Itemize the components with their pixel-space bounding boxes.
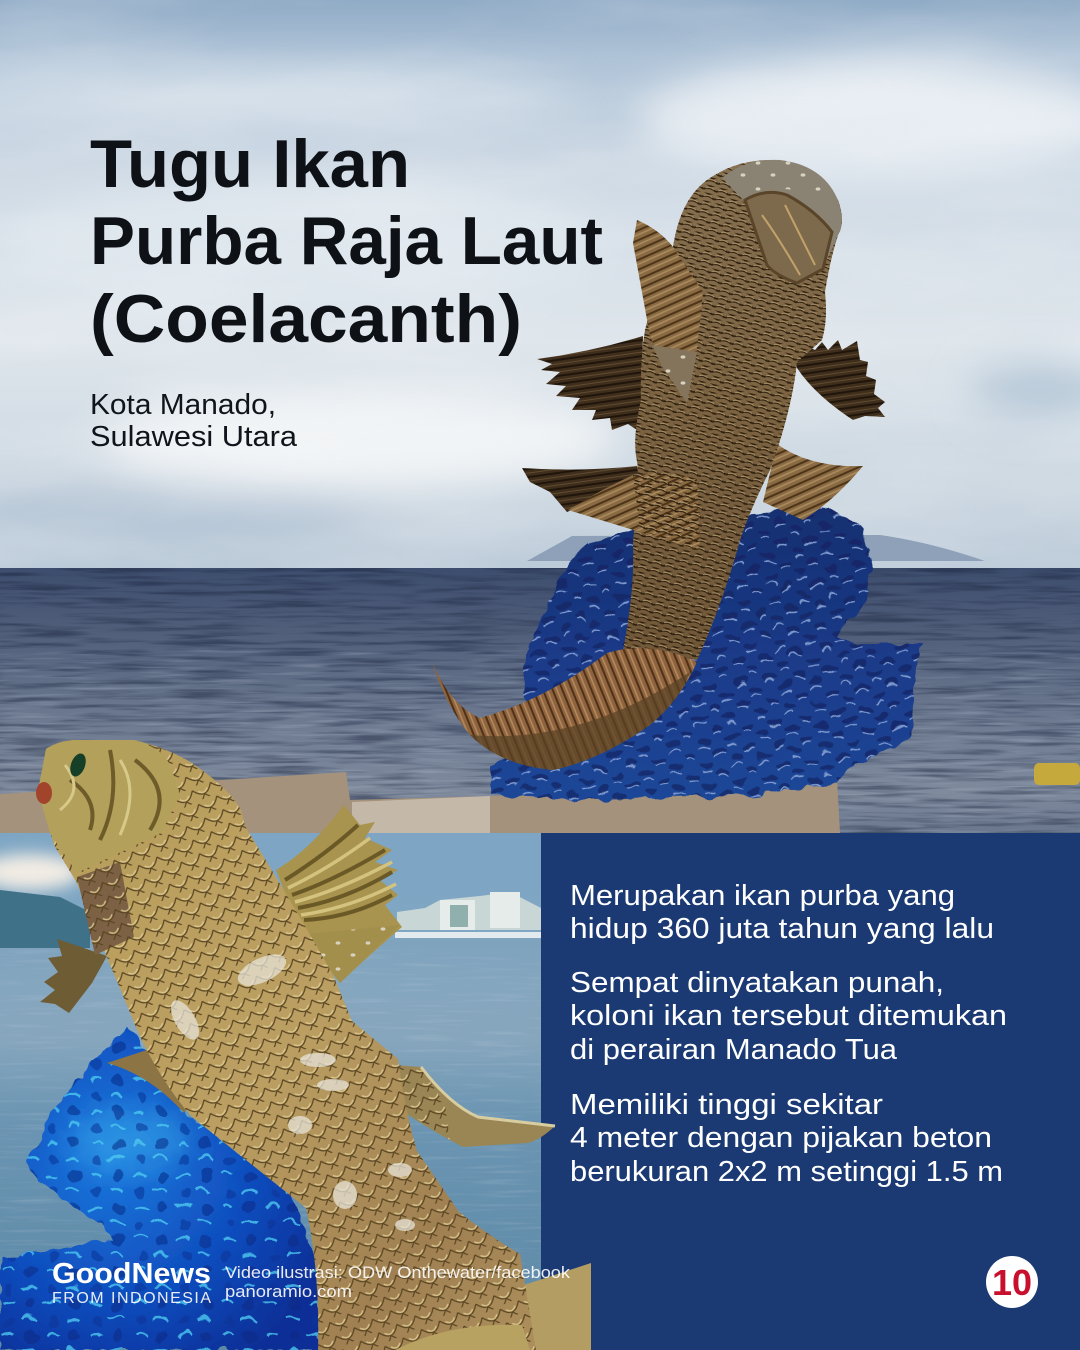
navy text panel: [541, 833, 1080, 1350]
location subtitle: Kota Manado,: [90, 389, 276, 421]
fact 2: di perairan Manado Tua: [570, 1034, 898, 1066]
head: [722, 160, 842, 283]
GoodNews logo: GoodNews: [52, 1258, 211, 1290]
location subtitle: [90, 389, 298, 453]
fin: top right golden: [276, 805, 402, 983]
fact 2: Sempat dinyatakan punah,: [570, 967, 944, 999]
lower statue: golden coelacanth sculpture: [36, 740, 591, 1350]
chest scales: [77, 862, 134, 955]
mouth: [36, 782, 52, 804]
title: Purba Raja Laut: [90, 203, 603, 279]
eye: [67, 751, 89, 779]
fact 1: Merupakan ikan purba yang: [570, 880, 955, 912]
fact 3: Memiliki tinggi sekitar: [570, 1089, 883, 1121]
fin: small left: [40, 939, 107, 1013]
fact 3: 4 meter dengan pijakan beton: [570, 1122, 992, 1154]
upper statue: blue wave base: [490, 508, 920, 800]
head: [36, 740, 180, 873]
title: (Coelacanth): [90, 281, 522, 357]
gold tail rays at bottom: [395, 1325, 530, 1350]
fact 1: hidup 360 juta tahun yang lalu: [570, 913, 994, 945]
fin: lower front left: [568, 473, 700, 551]
tail fin: [520, 1263, 591, 1350]
page number badge: 10: [992, 1262, 1032, 1303]
image credits: panoramio.com: [225, 1282, 352, 1301]
fact 2: [570, 967, 1007, 1066]
body: [623, 160, 842, 660]
fact 3: berukuran 2x2 m setinggi 1.5 m: [570, 1156, 1003, 1188]
GoodNews logo: FROM INDONESIA: [52, 1290, 211, 1307]
image credits: Video ilustrasi: ODW Onthewater/facebook: [225, 1263, 571, 1282]
upper statue: coelacanth sculpture: [432, 160, 885, 770]
image credits: [225, 1263, 571, 1301]
fact 3: [570, 1089, 1003, 1188]
fin: right dark: [787, 336, 885, 420]
tail fin: [432, 648, 697, 770]
title: Tugu Ikan: [90, 126, 410, 202]
fact 2: koloni ikan tersebut ditemukan: [570, 1000, 1007, 1032]
photo: sea and sky background: [0, 0, 1080, 833]
white scale highlights: [165, 948, 415, 1231]
title: [90, 126, 603, 357]
lower statue: blue wave base: [0, 1025, 318, 1350]
photo: lower left harbour background: [0, 833, 541, 1350]
GoodNews logo: [52, 1258, 211, 1307]
fin: lower left: [107, 1048, 190, 1113]
fin: lower back left: [522, 466, 640, 512]
location subtitle: Sulawesi Utara: [90, 421, 298, 453]
fin: upper dorsal: [633, 220, 703, 403]
page number badge: [986, 1256, 1038, 1308]
fin: upper left dark: [537, 336, 643, 432]
fin: lower right: [367, 1063, 555, 1147]
fin: lower right: [763, 444, 863, 520]
fact 1: [570, 880, 994, 945]
body: [38, 740, 536, 1350]
